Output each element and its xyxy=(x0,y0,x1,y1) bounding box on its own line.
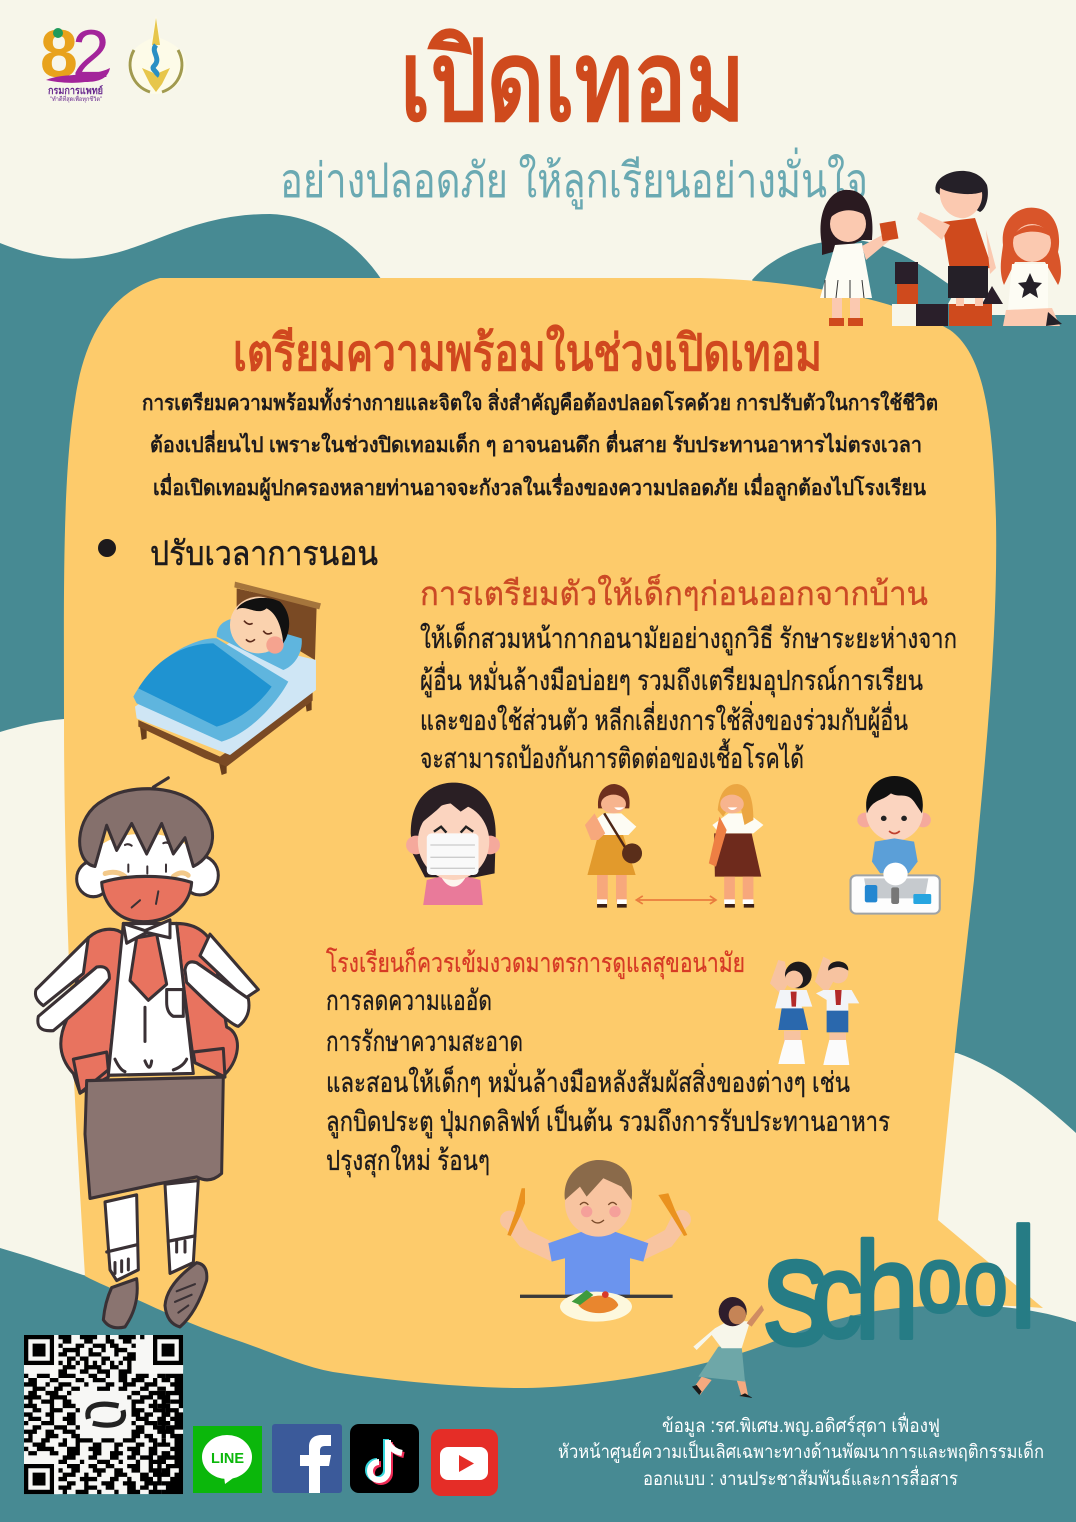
logo: 82 anniversary: กรมการแพทย์ xyxy=(48,85,103,97)
icon: boy eating with fork and knife xyxy=(500,1160,691,1322)
illustration: children with blocks xyxy=(820,171,1062,326)
subtitle: อย่างปลอดภัย ให้ลูกเรียนอย่างมั่นใจ xyxy=(280,147,868,210)
text block: preparation advice xyxy=(420,621,957,774)
background: cream lower right xyxy=(930,1053,1076,1322)
school lettering: l xyxy=(1010,1199,1037,1357)
boy in orange shirt xyxy=(917,171,996,306)
text block: preparation advice: และของใช้ส่วนตัว หลีกเลี่ยงการใช้สิ่งของร่วมกับผู้อื่น xyxy=(420,701,908,738)
QR code xyxy=(24,1335,183,1494)
icon: girl wearing mask xyxy=(406,783,500,905)
icon: TikTok xyxy=(350,1424,419,1493)
intro paragraph: ต้องเปลี่ยนไป เพราะในช่วงปิดเทอมเด็ก ๆ อาจนอนดึก ตื่นสาย รับประทานอาหารไม่ตรงเวลา xyxy=(150,429,922,457)
text block: preparation advice: จะสามารถป้องกันการติดต่อของเชื้อโรคได้ xyxy=(420,738,804,774)
footer credits xyxy=(558,1412,1044,1490)
title: เปิดเทอม xyxy=(400,19,745,144)
logo: medical seal xyxy=(128,15,186,94)
logo: 82 anniversary: "ทำดีที่สุดเพื่อทุกชีวิต" xyxy=(50,95,102,103)
text block: school hygiene measures: และสอนให้เด็กๆ หมั่นล้างมือหลังสัมผัสสิ่งของต่างๆ เช่น xyxy=(326,1063,850,1098)
heading: prepare for term opening: เตรียมความพร้อมในช่วงเปิดเทอม xyxy=(233,324,822,381)
girl with red hair xyxy=(1001,208,1062,326)
text block: school hygiene measures: การลดความแออัด xyxy=(326,985,492,1016)
intro paragraph: การเตรียมความพร้อมทั้งร่างกายและจิตใจ สิ่งสำคัญคือต้องปลอดโรคด้วย การปรับตัวในการใช้ชีวิต xyxy=(142,387,938,416)
school lettering: o xyxy=(918,1229,961,1331)
icon: LINE xyxy=(193,1426,262,1493)
text block: school hygiene measures: การรักษาความสะอาด xyxy=(326,1026,523,1057)
logo: 82 anniversary: 8 xyxy=(40,16,78,92)
girl with dark hair xyxy=(820,190,898,326)
text block: school hygiene measures: ลูกบิดประตู ปุ่มกดลิฟท์ เป็นต้น รวมถึงการรับประทานอาหาร xyxy=(326,1104,890,1139)
icon: YouTube xyxy=(431,1429,498,1496)
school lettering: c xyxy=(812,1228,863,1363)
icon: two pupils waving xyxy=(770,957,859,1065)
illustration: boy with mask and red backpack xyxy=(35,778,258,1328)
school lettering: s xyxy=(763,1205,829,1377)
intro paragraph xyxy=(142,387,938,502)
sub-heading: preparing before leaving home: การเตรียมตัวให้เด็กๆก่อนออกจากบ้าน xyxy=(420,574,928,612)
text block: preparation advice: ผู้อื่น หมั่นล้างมือบ่อยๆ รวมถึงเตรียมอุปกรณ์การเรียน xyxy=(420,661,923,698)
intro paragraph: เมื่อเปิดเทอมผู้ปกครองหลายท่านอาจจะกังวลในเรื่องของความปลอดภัย เมื่อลูกต้องไปโรงเรียน xyxy=(153,472,927,502)
bullet: adjust bedtime: ปรับเวลาการนอน xyxy=(150,535,378,573)
sub-heading: school measures: โรงเรียนก็ควรเข้มงวดมาตรการดูแลสุขอนามัย xyxy=(326,945,745,980)
school lettering: o xyxy=(964,1232,1007,1334)
logo: 82 anniversary xyxy=(40,16,110,103)
icon: boy washing hands xyxy=(851,776,940,914)
icon: Facebook xyxy=(272,1424,342,1493)
logo: 82 anniversary: 2 xyxy=(72,16,110,92)
icon: LINE: LINE xyxy=(211,1450,244,1467)
illustration: child sleeping in bed xyxy=(133,582,321,775)
panel: yellow main card xyxy=(64,278,1043,1388)
illustration: running schoolgirl xyxy=(692,1297,764,1398)
school lettering: h xyxy=(854,1214,919,1367)
footer credits: ออกแบบ : งานประชาสัมพันธ์และการสื่อสาร xyxy=(643,1465,958,1490)
icon: two schoolgirls keeping distance xyxy=(585,784,763,908)
illustrations: waving pupils and eating boy xyxy=(500,957,859,1322)
text block: school hygiene measures xyxy=(326,985,890,1178)
footer credits: ข้อมูล :รศ.พิเศษ.พญ.อดิศร์สุดา เฟื่องฟู xyxy=(662,1412,940,1438)
illustrations: mask, distancing, handwashing xyxy=(406,776,940,914)
text block: school hygiene measures: ปรุงสุกใหม่ ร้อนๆ xyxy=(326,1144,490,1178)
